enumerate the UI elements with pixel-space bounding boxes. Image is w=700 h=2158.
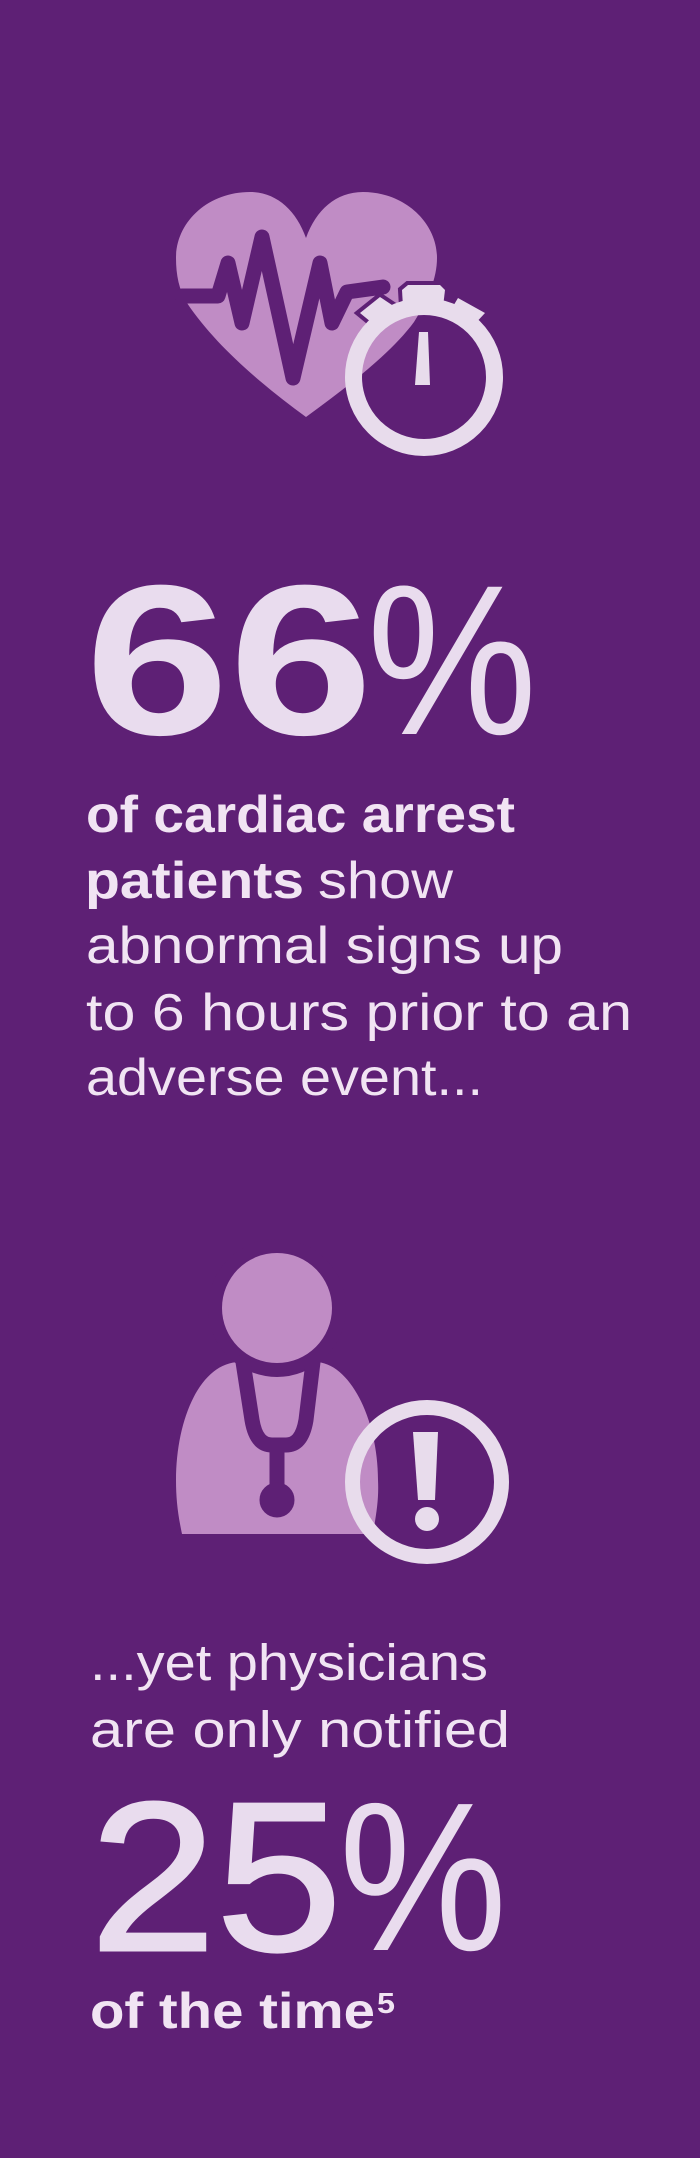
physician body bbox=[176, 1362, 378, 1534]
text block: cardiac arrest patients bbox=[85, 786, 632, 1107]
statistic: 25%: 25 bbox=[90, 1758, 342, 1995]
text block: cardiac arrest patients: of cardiac arrest bbox=[86, 786, 515, 844]
text block: physicians notified: ...yet physicians bbox=[90, 1634, 488, 1691]
text block: physicians notified: are only notified bbox=[90, 1701, 510, 1758]
statistic: 66% bbox=[85, 541, 537, 780]
text block: cardiac arrest patients: abnormal signs up bbox=[86, 917, 563, 975]
ECG pulse line bbox=[182, 237, 383, 378]
text block: of the time with footnote: 5 bbox=[377, 1988, 395, 2020]
stethoscope bbox=[243, 1362, 313, 1510]
statistic: 66%: 66 bbox=[85, 541, 373, 780]
text block: cardiac arrest patients: show bbox=[318, 852, 453, 910]
icon: heart with ECG line and stopwatch bbox=[176, 192, 494, 448]
text block: physicians notified bbox=[90, 1634, 510, 1758]
text block: of the time with footnote: of the time bbox=[90, 1983, 375, 2039]
statistic: 66%: % bbox=[367, 541, 537, 780]
heart shape bbox=[176, 192, 437, 417]
physician head bbox=[222, 1253, 332, 1363]
text block: cardiac arrest patients: patients bbox=[85, 852, 304, 910]
statistic: 25% bbox=[90, 1758, 507, 1995]
stopwatch bbox=[354, 285, 494, 448]
statistic: 25%: % bbox=[339, 1758, 507, 1995]
alert ring with exclamation mark bbox=[352, 1408, 502, 1556]
text block: cardiac arrest patients: adverse event... bbox=[86, 1049, 483, 1107]
text block: cardiac arrest patients: to 6 hours prior to an bbox=[86, 984, 632, 1042]
icon: physician with stethoscope and alert bbox=[176, 1253, 502, 1556]
